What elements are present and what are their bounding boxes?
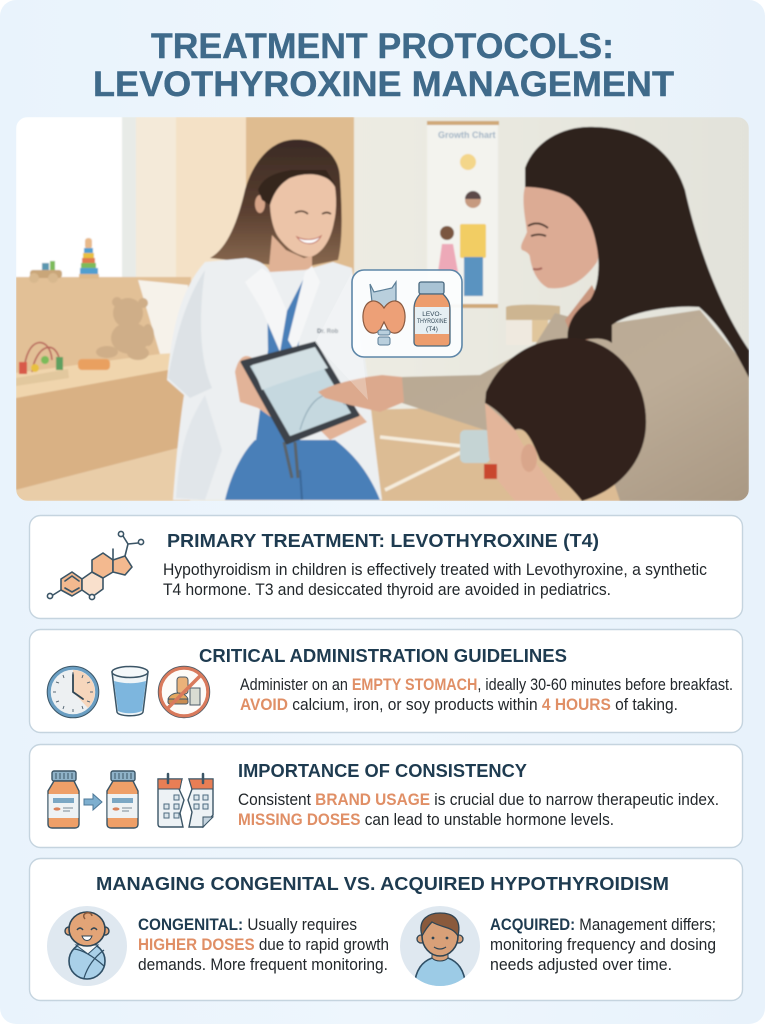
mother bbox=[318, 127, 749, 501]
body text: T4 hormone. T3 and desiccated thyroid are avoided in pediatrics. bbox=[163, 581, 611, 599]
doctor: Dr. Rob bbox=[317, 329, 339, 335]
title: LEVOTHYROXINE MANAGEMENT bbox=[93, 65, 674, 104]
panel: critical administration guidelines bbox=[30, 630, 742, 732]
icon: matching bottles with arrow bbox=[48, 771, 138, 828]
text: acquired bbox=[490, 916, 716, 974]
teddy bear bbox=[96, 297, 154, 360]
text: acquired: monitoring frequency and dosing bbox=[490, 936, 716, 954]
wood wall panel bbox=[246, 117, 354, 277]
tablet bbox=[242, 343, 358, 443]
highlight beam bbox=[315, 328, 368, 400]
icon: clock bbox=[47, 666, 99, 718]
panel: managing congenital vs. acquired hypothyroidism bbox=[30, 858, 742, 1000]
icon: levothyroxine molecule bbox=[47, 531, 144, 600]
growth chart poster: Growth Chart bbox=[438, 130, 496, 140]
body text bbox=[240, 676, 733, 714]
icon: broken calendar bbox=[158, 774, 213, 827]
title bbox=[93, 27, 674, 104]
bead maze toy bbox=[16, 343, 69, 386]
window bbox=[16, 117, 246, 287]
doctor bbox=[167, 139, 382, 500]
body text: AVOID calcium, iron, or soy products within 4 HOURS of taking. bbox=[240, 696, 678, 714]
stacking toy bbox=[79, 238, 99, 279]
icon: no food or supplements bbox=[158, 666, 210, 718]
pillow bbox=[138, 280, 188, 354]
toy car bbox=[29, 261, 62, 283]
icon: bottle labelled LEVO-THYROXINE T4 bbox=[414, 282, 450, 346]
toy behind boy bbox=[460, 430, 490, 463]
bench bbox=[16, 277, 195, 501]
small toy on bench bbox=[78, 359, 110, 370]
icon: swaddled baby bbox=[47, 906, 127, 986]
panel: primary treatment bbox=[30, 516, 742, 618]
icon: glass of water bbox=[112, 666, 148, 716]
rail and crib behind mother bbox=[506, 305, 560, 345]
boy bbox=[484, 338, 646, 501]
heading: CRITICAL ADMINISTRATION GUIDELINES bbox=[199, 646, 567, 666]
text: congenital: HIGHER DOSES due to rapid growth bbox=[138, 936, 389, 954]
text: acquired: needs adjusted over time. bbox=[490, 956, 672, 974]
growth chart poster bbox=[427, 121, 499, 308]
panel: importance of consistency bbox=[30, 744, 742, 848]
text: acquired: ACQUIRED: Management differs; bbox=[490, 916, 716, 934]
text: congenital: CONGENITAL: Usually requires bbox=[138, 916, 357, 934]
heading: IMPORTANCE OF CONSISTENCY bbox=[238, 761, 527, 781]
text: congenital bbox=[138, 916, 389, 974]
heading: MANAGING CONGENITAL VS. ACQUIRED HYPOTHYROIDISM bbox=[96, 874, 669, 894]
body text: MISSING DOSES can lead to unstable hormone levels. bbox=[238, 811, 614, 829]
body text bbox=[238, 791, 719, 829]
icon: bottle labelled LEVO-THYROXINE T4: THYROXINE bbox=[417, 318, 448, 325]
photo: doctor, mother and child in a pediatric clinic bbox=[16, 117, 749, 501]
icon: child bbox=[400, 906, 480, 992]
icon: bottle labelled LEVO-THYROXINE T4: (T4) bbox=[426, 326, 438, 333]
icon: thyroid gland bbox=[363, 282, 405, 345]
body text: Administer on an EMPTY STOMACH, ideally 30-60 minutes before breakfast. bbox=[240, 676, 733, 694]
heading: PRIMARY TREATMENT: LEVOTHYROXINE (T4) bbox=[167, 531, 599, 551]
title: TREATMENT PROTOCOLS: bbox=[151, 27, 614, 66]
callout: thyroid and levothyroxine bottle bbox=[352, 270, 462, 357]
body text bbox=[163, 561, 707, 599]
icon: bottle labelled LEVO-THYROXINE T4: LEVO- bbox=[422, 311, 442, 318]
floor bbox=[370, 408, 620, 501]
text: congenital: demands. More frequent monitoring. bbox=[138, 956, 388, 974]
body text: Hypothyroidism in children is effectively treated with Levothyroxine, a synthetic bbox=[163, 561, 707, 579]
body text: Consistent BRAND USAGE is crucial due to narrow therapeutic index. bbox=[238, 791, 719, 809]
